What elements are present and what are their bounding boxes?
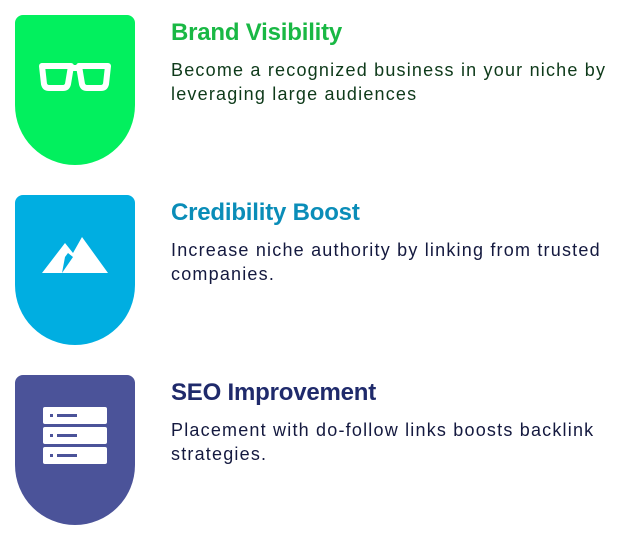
shield: credibility boost bbox=[15, 195, 135, 345]
text: credibility boost: companies. bbox=[171, 264, 275, 284]
text: seo improvement bbox=[171, 420, 594, 464]
icon: mountains bbox=[42, 237, 108, 273]
icon: server list bbox=[43, 407, 107, 464]
shield: seo improvement bbox=[15, 375, 135, 525]
shield: brand visibility bbox=[15, 15, 135, 165]
title: seo improvement: SEO Improvement bbox=[171, 379, 376, 406]
text: brand visibility bbox=[171, 60, 606, 104]
text: credibility boost bbox=[171, 240, 601, 284]
icon: glasses bbox=[39, 63, 111, 91]
text: seo improvement: Placement with do-follow links boosts backlink bbox=[171, 420, 594, 440]
text: seo improvement: strategies. bbox=[171, 444, 267, 464]
text: brand visibility: leveraging large audiences bbox=[171, 84, 417, 104]
title: brand visibility: Brand Visibility bbox=[171, 19, 342, 46]
text: brand visibility: Become a recognized business in your niche by bbox=[171, 60, 606, 80]
text: credibility boost: Increase niche authority by linking from trusted bbox=[171, 240, 601, 260]
title: credibility boost: Credibility Boost bbox=[171, 199, 360, 226]
